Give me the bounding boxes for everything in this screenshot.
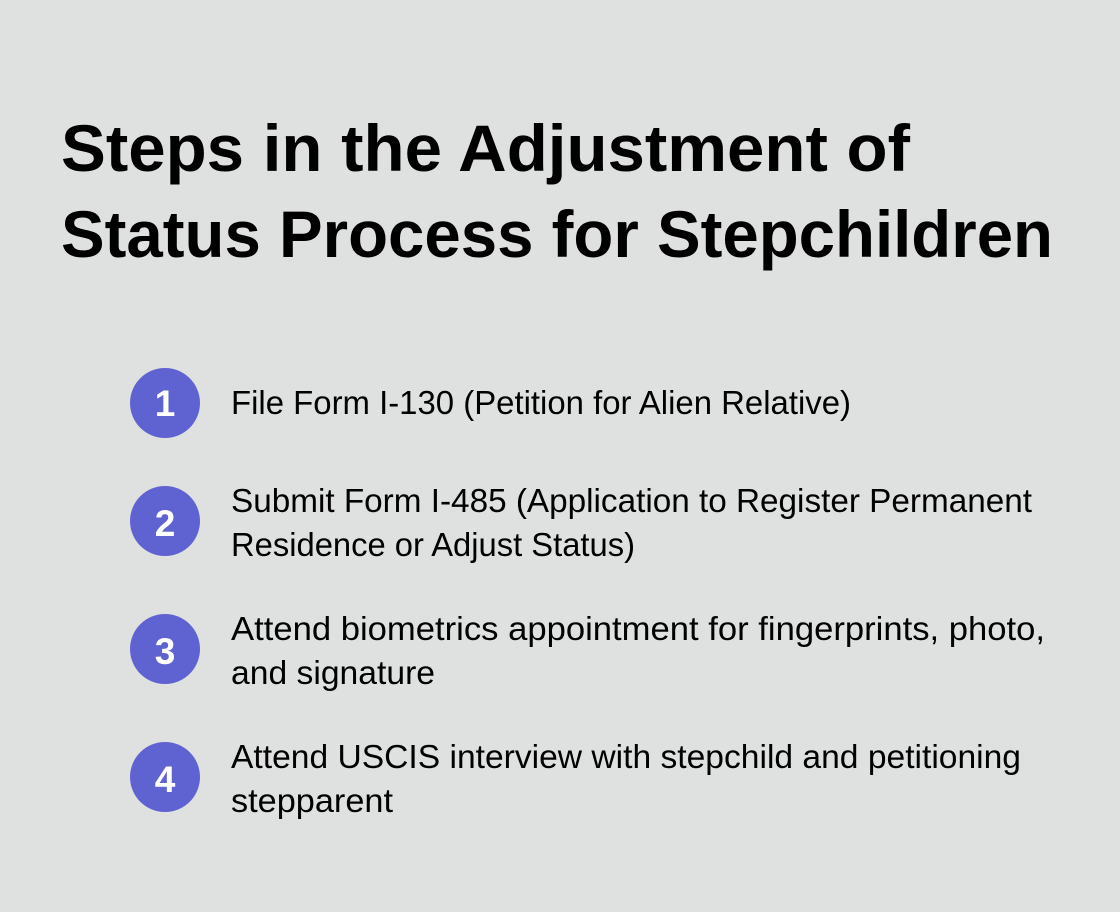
icon: number 2 badge <box>130 486 200 556</box>
icon: number 3 badge: 3 <box>155 631 175 672</box>
title <box>61 111 1053 271</box>
icon: number 2 badge: 2 <box>155 503 175 544</box>
step 2 text <box>231 482 1032 563</box>
icon: number 4 badge <box>130 742 200 812</box>
icon: number 4 badge: 4 <box>155 759 176 800</box>
step 3 text: and signature <box>231 654 435 691</box>
title: Steps in the Adjustment of <box>61 111 911 185</box>
step 3 text: Attend biometrics appointment for fingerprints, photo, <box>231 610 1045 647</box>
step 2 text: Submit Form I-485 (Application to Register Permanent <box>231 482 1032 519</box>
step 3 text <box>231 610 1045 691</box>
step 2 text: Residence or Adjust Status) <box>231 526 635 563</box>
step 2 <box>130 482 1032 563</box>
step 4 text <box>231 738 1021 819</box>
icon: number 1 badge <box>130 368 200 438</box>
icon: number 1 badge: 1 <box>155 383 175 424</box>
step 3 <box>130 610 1045 691</box>
icon: number 3 badge <box>130 614 200 684</box>
step 4 text: stepparent <box>231 782 393 819</box>
title: Status Process for Stepchildren <box>61 197 1053 271</box>
step 4 text: Attend USCIS interview with stepchild and petitioning <box>231 738 1021 775</box>
step 1 <box>130 368 851 438</box>
step 1 text: File Form I-130 (Petition for Alien Relative) <box>231 384 851 421</box>
step 4 <box>130 738 1021 819</box>
